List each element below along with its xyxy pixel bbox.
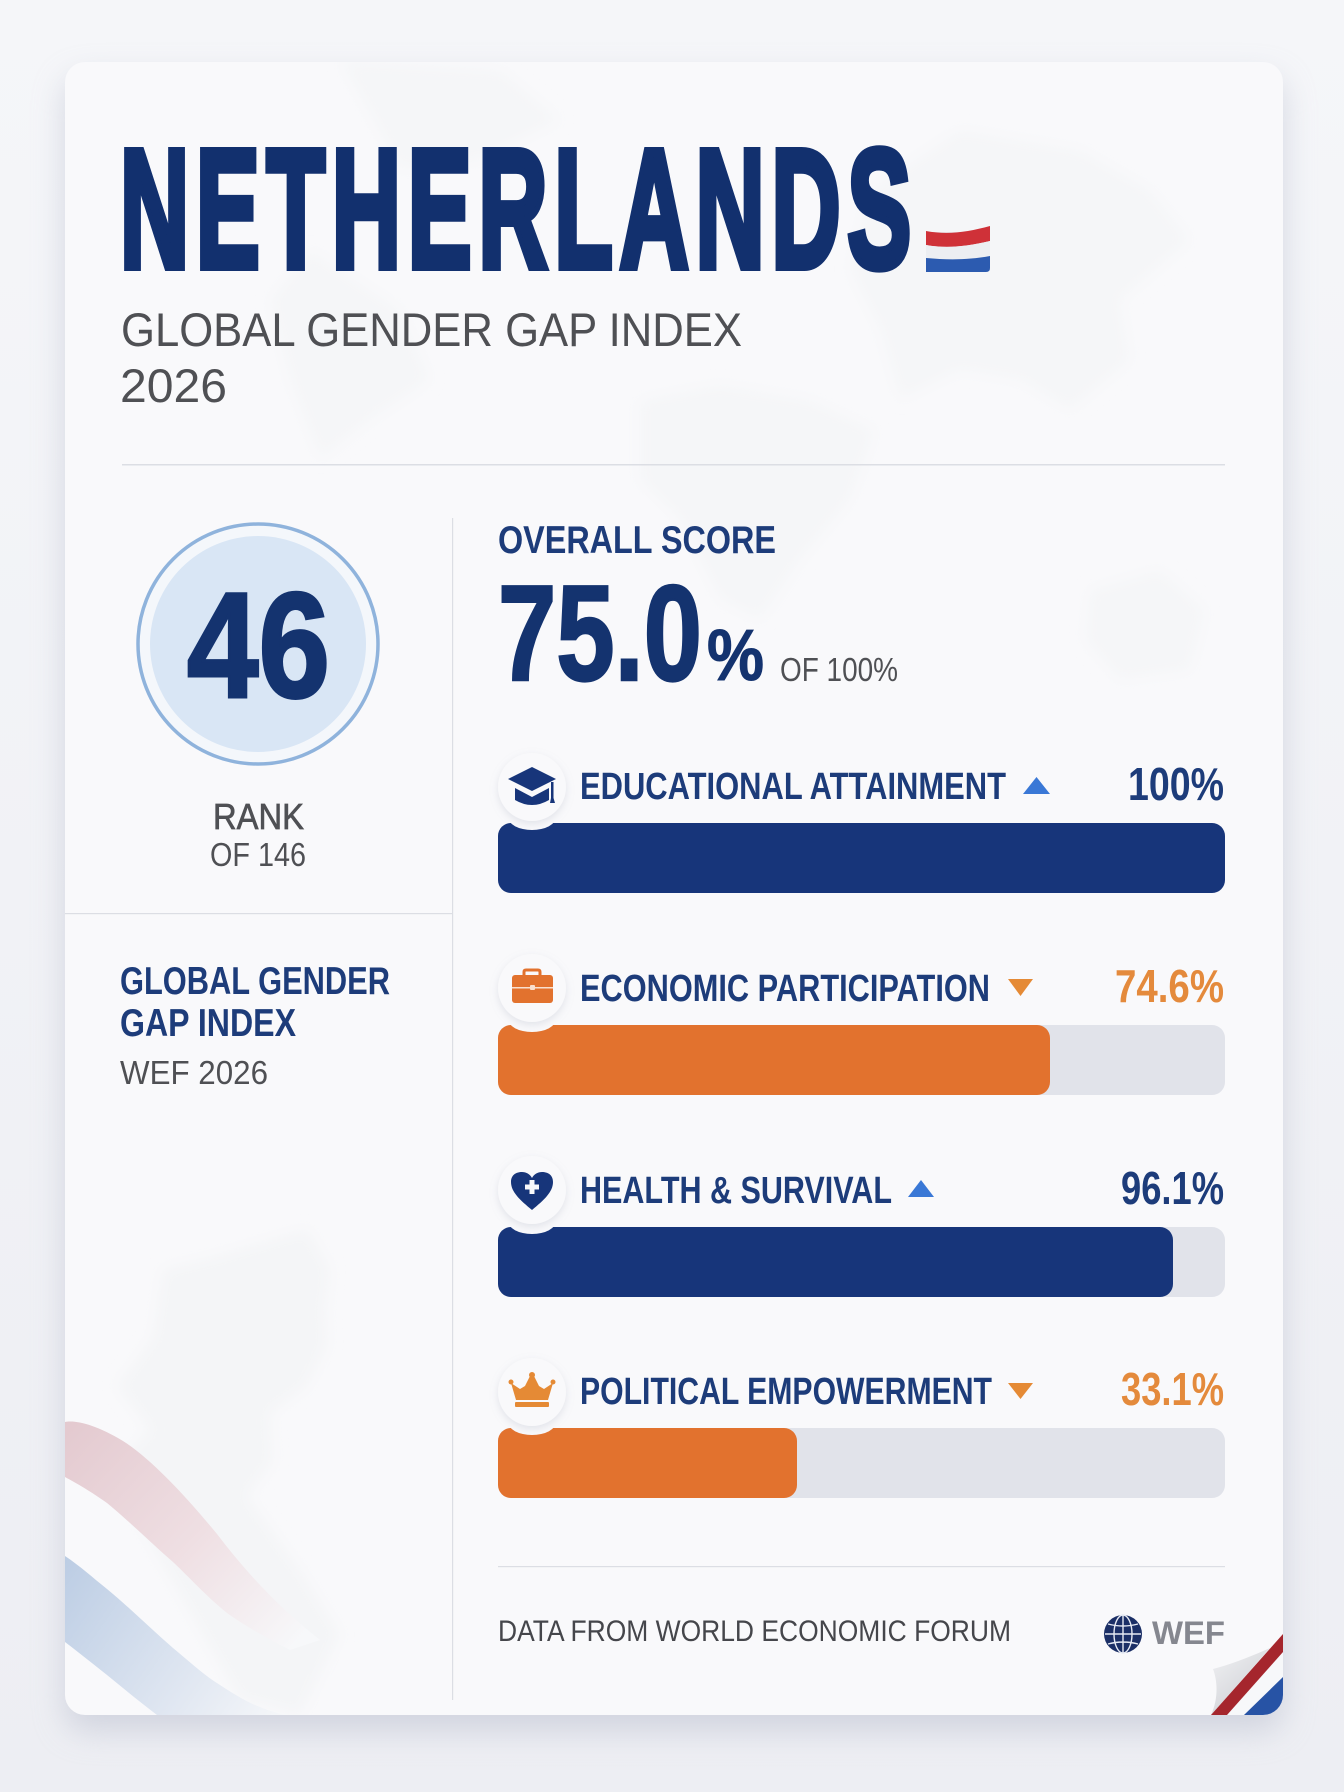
- icon: crown: [498, 1358, 566, 1426]
- fold white stripe: [1227, 1652, 1283, 1715]
- panel: political empowerment: [498, 1358, 1225, 1498]
- score label: OVERALL SCORE: [498, 519, 776, 562]
- icon: globe: [1104, 1615, 1142, 1653]
- rank label: RANK: [213, 796, 304, 837]
- of 100: OF 100%: [780, 651, 898, 688]
- value: 74.6%: [1115, 960, 1224, 1012]
- subtitle: [120, 303, 742, 412]
- percent sign: %: [707, 616, 764, 696]
- panel: economic participation: [498, 954, 1225, 1095]
- ribbon: red band: [65, 1422, 262, 1616]
- label: POLITICAL EMPOWERMENT: [580, 1371, 992, 1413]
- WEF wordmark: WEF: [1152, 1615, 1225, 1651]
- ribbon: blue band: [65, 1556, 256, 1715]
- arrow down: [1008, 1383, 1033, 1399]
- index name: GAP INDEX: [120, 1002, 296, 1045]
- decorative flag ribbon: [65, 1422, 262, 1715]
- panel: index note: [120, 960, 390, 1091]
- score value: 75.0: [498, 557, 702, 709]
- arrow up: [908, 1180, 934, 1197]
- icon: Dutch flag: [926, 226, 990, 272]
- panel: educational attainment: [498, 753, 1225, 893]
- fold blue stripe: [1244, 1677, 1283, 1715]
- bar track and fill: [498, 1409, 1225, 1498]
- value: 33.1%: [1121, 1363, 1224, 1415]
- index name: GLOBAL GENDER: [120, 960, 390, 1003]
- WEF logo: [1104, 1615, 1225, 1653]
- subtitle: 2026: [120, 359, 227, 412]
- panel: overall score: [498, 519, 898, 709]
- fold underside: [1211, 1648, 1270, 1715]
- source year: WEF 2026: [120, 1054, 268, 1091]
- rank circle: [138, 524, 378, 764]
- rank number: 46: [187, 561, 330, 729]
- bar track and fill: [498, 1006, 1225, 1095]
- value: 100%: [1128, 758, 1224, 810]
- corner page fold with flag stripes: [1211, 1634, 1283, 1715]
- bar track and fill: [498, 1208, 1225, 1297]
- icon: graduation cap: [498, 753, 566, 821]
- label: HEALTH & SURVIVAL: [580, 1170, 892, 1212]
- watermark: Netherlands map: [110, 1229, 340, 1715]
- value: 96.1%: [1121, 1162, 1224, 1214]
- label: EDUCATIONAL ATTAINMENT: [580, 766, 1006, 808]
- icon: briefcase: [498, 954, 566, 1022]
- subtitle: GLOBAL GENDER GAP INDEX: [121, 303, 742, 356]
- fold red stripe: [1211, 1634, 1283, 1715]
- bar track and fill: [498, 804, 1225, 893]
- panel: health and survival: [498, 1156, 1225, 1297]
- arrow down: [1008, 979, 1033, 996]
- footer source: DATA FROM WORLD ECONOMIC FORUM: [498, 1615, 1011, 1648]
- panel: rank: [138, 524, 378, 873]
- rank total: OF 146: [210, 836, 306, 873]
- watermark: world map: [270, 60, 1205, 680]
- label: ECONOMIC PARTICIPATION: [580, 968, 990, 1010]
- arrow up: [1023, 777, 1050, 794]
- icon: heart with cross: [498, 1156, 566, 1224]
- index name: [120, 960, 390, 1045]
